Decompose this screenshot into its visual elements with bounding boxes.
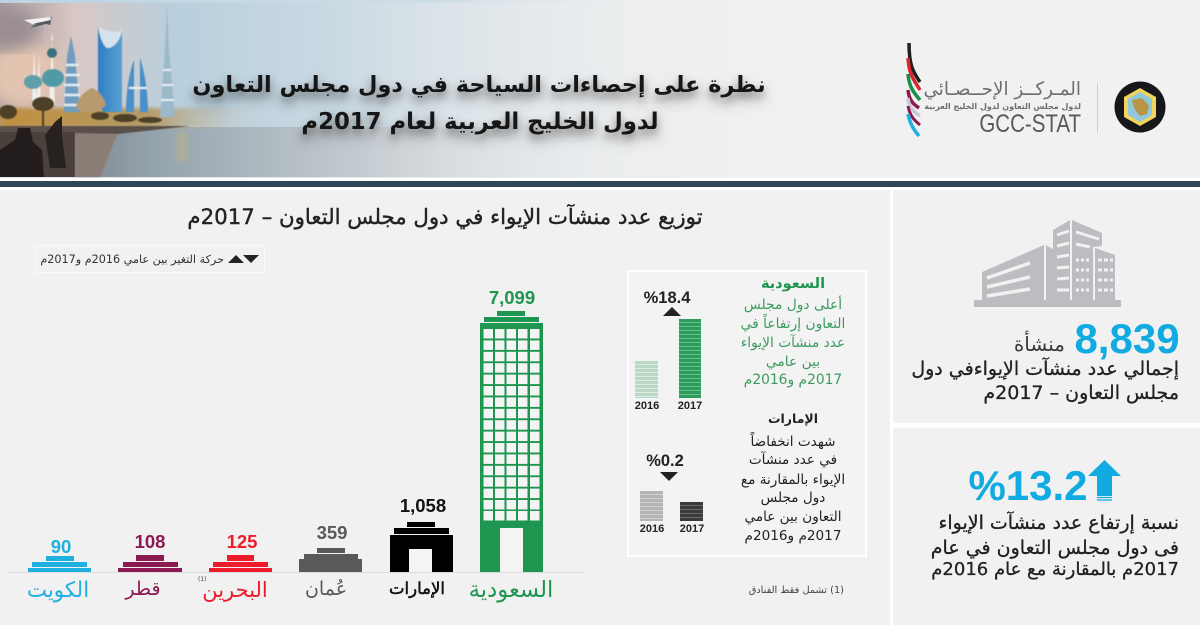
- text: UAE note: دول مجلس: [761, 490, 825, 506]
- text: UAE note: الإيواء بالمقارنة مع: [741, 472, 845, 488]
- logo: GCC-STAT: لدول مجلس التعاون لدول الخليج العربية: [924, 102, 1081, 111]
- bar: Oman: [299, 522, 362, 572]
- bar: Bahrain: 125: [227, 531, 257, 552]
- title: نظرة على إحصاءات السياحة في دول مجلس التعاون: [192, 72, 766, 98]
- title: لدول الخليج العربية لعام 2017م: [301, 109, 659, 135]
- text: growth description: فى دول مجلس التعاون في عام: [931, 537, 1179, 559]
- bar: Qatar: [118, 531, 182, 572]
- bar: Saudi Arabia: 7,099: [489, 287, 535, 308]
- bar: Kuwait: 90: [51, 536, 71, 557]
- mini chart: Saudi: 2016: [635, 400, 659, 412]
- panel: total facilities: [893, 190, 1200, 423]
- mini chart: Saudi: 2017: [678, 400, 702, 412]
- text: total description: إجمالي عدد منشآت الإيواءفي دول: [911, 358, 1179, 380]
- panel: growth rate: [893, 428, 1200, 625]
- text: UAE note: الإمارات: [768, 411, 818, 426]
- bar: Saudi Arabia: [480, 287, 543, 572]
- country labels: الإمارات: [389, 579, 445, 598]
- mini chart: Saudi: %18.4: [644, 289, 690, 307]
- text: total description: مجلس التعاون – 2017م: [983, 382, 1179, 404]
- text: Saudi note: السعودية: [761, 276, 825, 292]
- bar: UAE: [390, 495, 453, 572]
- text: Saudi note: التعاون إرتفاعاً في: [741, 316, 845, 332]
- text: growth description: نسبة إرتفاع عدد منشآت الإيواء: [938, 512, 1179, 534]
- icon: GCC emblem: [1114, 82, 1166, 132]
- country labels: السعودية: [469, 577, 553, 603]
- legend: حركة التغير بين عامي 2016م و2017م: [40, 253, 224, 266]
- country labels: الكويت: [27, 578, 89, 603]
- bar: Oman: 359: [317, 522, 347, 543]
- text: Saudi note: عدد منشآت الإيواء: [741, 335, 845, 351]
- header band: [0, 0, 1200, 178]
- bar chart: facilities by country: [8, 287, 585, 573]
- chart title: توزيع عدد منشآت الإيواء في دول مجلس التعاون – 2017م: [187, 205, 703, 230]
- panel: change highlights: [627, 270, 867, 557]
- icon: up arrow: [1088, 460, 1121, 501]
- mini chart: UAE: %0.2: [646, 452, 684, 470]
- text: growth description: 2017م بالمقارنة مع عام 2016م: [931, 559, 1179, 580]
- country labels: عُمان: [305, 578, 347, 600]
- panel: chart: [0, 190, 890, 625]
- mini chart: Saudi: [635, 289, 702, 412]
- text: UAE note: التعاون بين عامي: [744, 509, 842, 525]
- mini chart: UAE: [640, 452, 704, 535]
- footnote: (1) تشمل فقط الفنادق: [749, 585, 844, 596]
- text: growth description: [931, 511, 1179, 580]
- stat: 8,839: 8,839: [1074, 314, 1180, 362]
- bar: Bahrain: [209, 531, 272, 572]
- country labels: [27, 576, 553, 603]
- text: UAE note: 2017م و2016م: [745, 528, 841, 544]
- country labels: (1): [198, 576, 207, 583]
- logo: GCC-STAT: GCC-STAT: [979, 110, 1081, 138]
- text: Saudi note: 2017م و2016م: [744, 372, 842, 388]
- title: [188, 72, 770, 148]
- stat: 13.2%: %13.2: [968, 462, 1088, 508]
- logo: GCC-STAT: المـركــز الإحــصـائي: [923, 79, 1081, 100]
- mini chart: UAE: 2016: [640, 523, 664, 535]
- bar: Kuwait: [28, 536, 91, 572]
- text: Saudi note: أعلى دول مجلس: [744, 297, 842, 313]
- bar: Qatar: 108: [135, 531, 165, 552]
- text: Saudi note: بين عامي: [766, 354, 820, 370]
- country labels: البحرين: [202, 578, 268, 602]
- text: total description: [911, 357, 1179, 404]
- logo: GCC-STAT: [906, 43, 1081, 138]
- text: UAE note: [741, 411, 845, 544]
- mini chart: UAE: 2017: [680, 523, 704, 535]
- text: UAE note: شهدت انخفاضاً: [751, 434, 835, 450]
- icon: building: [974, 220, 1121, 307]
- text: Saudi note: [741, 276, 845, 388]
- legend: [35, 245, 265, 273]
- country labels: قطر: [125, 578, 161, 600]
- header photo collage: [0, 0, 540, 178]
- header divider bar: [0, 181, 1200, 187]
- text: facilities unit: منشأة: [1014, 332, 1065, 356]
- text: UAE note: في عدد منشآت: [749, 452, 837, 468]
- bar: UAE: 1,058: [400, 495, 446, 516]
